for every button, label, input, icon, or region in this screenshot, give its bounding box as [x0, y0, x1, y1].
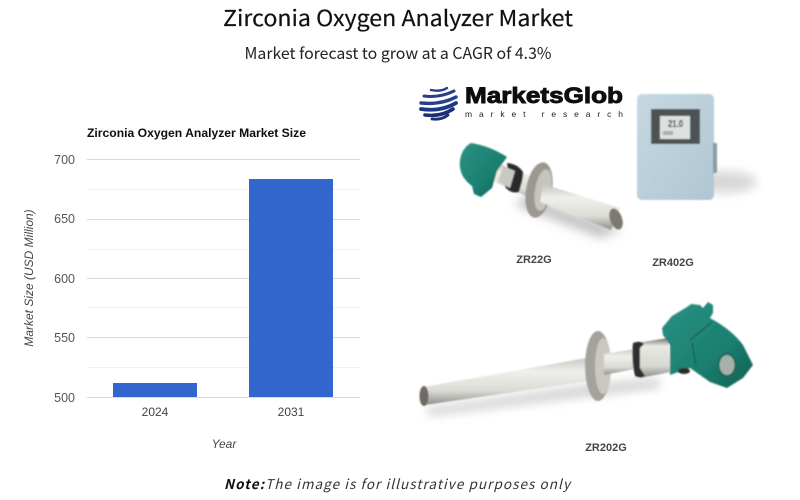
x axis labels: 2024 — [142, 405, 169, 419]
subtitle: Market forecast to grow at a CAGR of 4.3% — [244, 40, 552, 64]
label: ZR202G: ZR202G — [585, 442, 627, 454]
y axis labels: 700 — [54, 153, 75, 167]
note: Note:The image is for illustrative purposes only — [224, 473, 572, 493]
box shadow — [693, 171, 757, 193]
logo tagline: market research — [465, 109, 623, 119]
probe tip — [420, 386, 428, 406]
flange — [521, 160, 557, 220]
black collar — [505, 163, 523, 192]
upper tube — [604, 348, 640, 375]
front tube — [540, 184, 620, 230]
y axis labels: 500 — [54, 391, 75, 405]
display reading: 21.0 — [668, 119, 683, 130]
gridlines — [87, 160, 360, 398]
y axis labels — [54, 153, 75, 405]
probe tube — [423, 357, 597, 405]
display screen — [660, 116, 690, 139]
x axis labels: 2031 — [278, 405, 305, 419]
y axis labels: 550 — [54, 331, 75, 345]
bar: 2024 — [113, 383, 197, 397]
title: Zirconia Oxygen Analyzer Market — [223, 1, 573, 33]
x axis title: Year — [212, 437, 237, 451]
bar chart: market size — [22, 126, 360, 451]
y axis labels: 600 — [54, 272, 75, 286]
logo wordmark: MarketsGlob — [465, 83, 623, 108]
probe shadow — [515, 195, 622, 238]
y axis title: Market Size (USD Million) — [22, 209, 36, 347]
product: ZR402G converter — [637, 94, 757, 200]
sleeve — [636, 338, 671, 378]
product: ZR22G probe — [460, 143, 625, 238]
probe tip — [607, 207, 625, 231]
probe shadow — [425, 378, 660, 416]
rear tube — [485, 161, 545, 202]
chart title: Zirconia Oxygen Analyzer Market Size — [87, 126, 306, 140]
label: ZR402G: ZR402G — [652, 257, 694, 269]
collar — [632, 342, 645, 378]
logo: MarketsGlob — [421, 83, 623, 119]
label: ZR22G: ZR22G — [516, 254, 552, 266]
head seam — [690, 322, 712, 366]
mount foot — [678, 368, 690, 374]
y axis labels: 650 — [54, 212, 75, 226]
product: ZR202G probe — [420, 302, 753, 416]
teal head — [662, 302, 753, 388]
converter housing — [637, 94, 714, 200]
display bezel — [651, 109, 700, 144]
x axis labels — [142, 405, 305, 419]
flange — [585, 331, 611, 401]
icon: striped globe — [421, 88, 456, 119]
bar: 2031 — [249, 179, 333, 397]
head window — [718, 353, 736, 377]
teal head — [460, 143, 507, 197]
